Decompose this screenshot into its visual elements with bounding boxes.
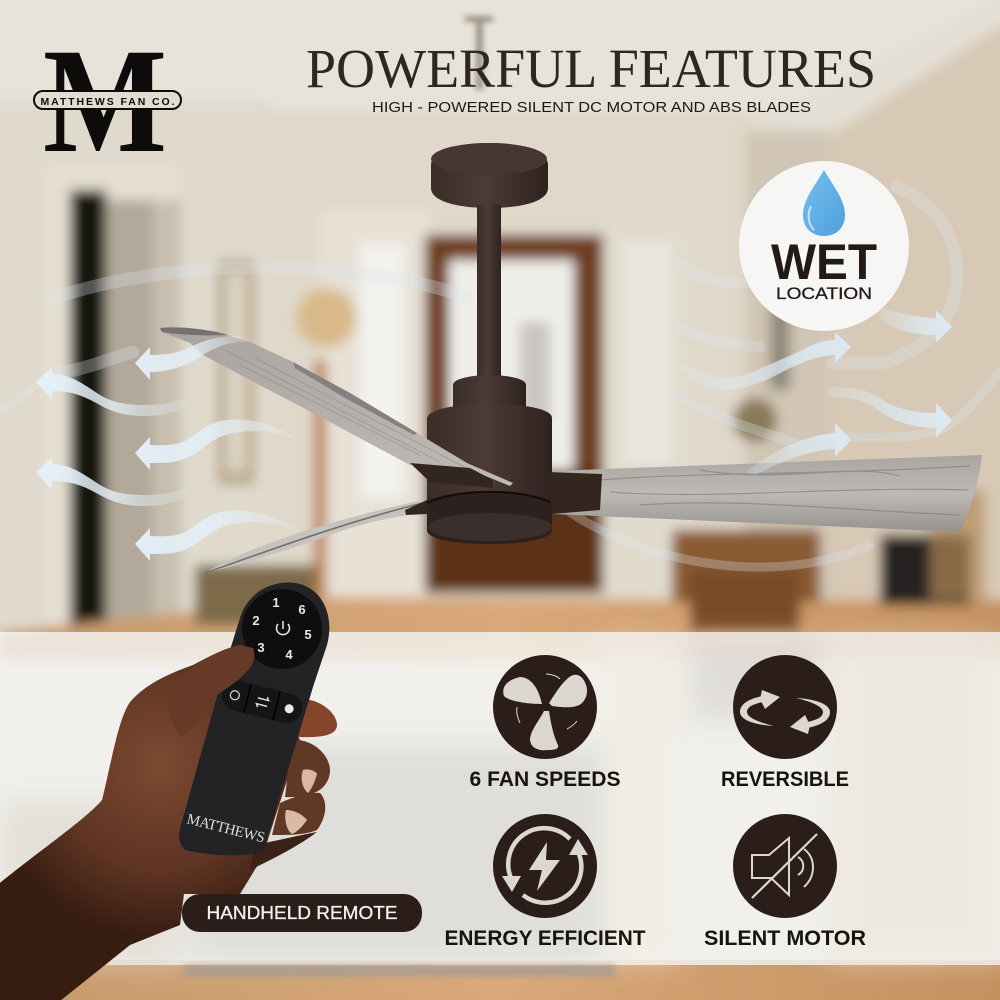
logo: MATTHEWS FAN CO.	[40, 96, 175, 108]
remote button labels: 4	[285, 647, 293, 662]
feature: reversible: REVERSIBLE	[721, 768, 849, 791]
remote button labels: 5	[304, 627, 312, 642]
feature: energy efficient	[444, 814, 646, 950]
fan blade bracket	[410, 463, 493, 488]
wet location badge: LOCATION	[776, 284, 872, 303]
translucent feature panel	[0, 632, 1000, 977]
remote control	[179, 583, 329, 855]
fan blade: right	[547, 455, 982, 532]
feature: silent motor: SILENT MOTOR	[704, 927, 866, 950]
subtitle: HIGH - POWERED SILENT DC MOTOR AND ABS BLADES	[372, 100, 811, 116]
icon: energy cycle bolt	[502, 828, 588, 903]
thumb	[169, 645, 254, 738]
icon: water drop	[803, 170, 845, 236]
remote button labels	[252, 595, 312, 662]
feature: 6 fan speeds: 6 FAN SPEEDS	[470, 768, 620, 791]
handheld remote pill	[182, 894, 422, 932]
fan blade: lower left	[205, 500, 427, 573]
title: POWERFUL FEATURES	[306, 38, 876, 99]
icon: rotate arrows	[740, 690, 830, 734]
fan blade: upper left	[160, 327, 513, 486]
feature: silent motor	[704, 814, 866, 950]
icon: fan	[503, 674, 587, 750]
remote light and reverse buttons	[219, 678, 305, 726]
airflow arrows: left side	[36, 336, 300, 561]
feature: energy efficient: ENERGY EFFICIENT	[444, 927, 646, 950]
feature: reversible	[721, 655, 849, 791]
fan: motor housing	[427, 375, 552, 544]
wet location badge: WET	[771, 234, 877, 290]
airflow arrows: right side	[677, 306, 952, 475]
remote control: MATTHEWS	[185, 812, 267, 846]
remote button labels: 2	[252, 613, 260, 628]
hand palm and forearm	[0, 645, 300, 1000]
remote button labels: 1	[272, 595, 280, 610]
ceiling light rod behind heading	[465, 16, 493, 90]
remote button labels: 3	[257, 640, 265, 655]
fan: downrod and canopy	[431, 143, 548, 383]
handheld remote pill: HANDHELD REMOTE	[206, 903, 398, 923]
feature: 6 fan speeds	[470, 655, 620, 791]
wet location badge	[739, 161, 909, 331]
remote button labels: 6	[298, 602, 306, 617]
fingers	[250, 699, 337, 870]
icon: power	[276, 621, 290, 635]
airflow: faint background ribbons	[0, 187, 1000, 567]
icon: muted speaker	[752, 834, 817, 898]
logo: M	[43, 18, 167, 184]
